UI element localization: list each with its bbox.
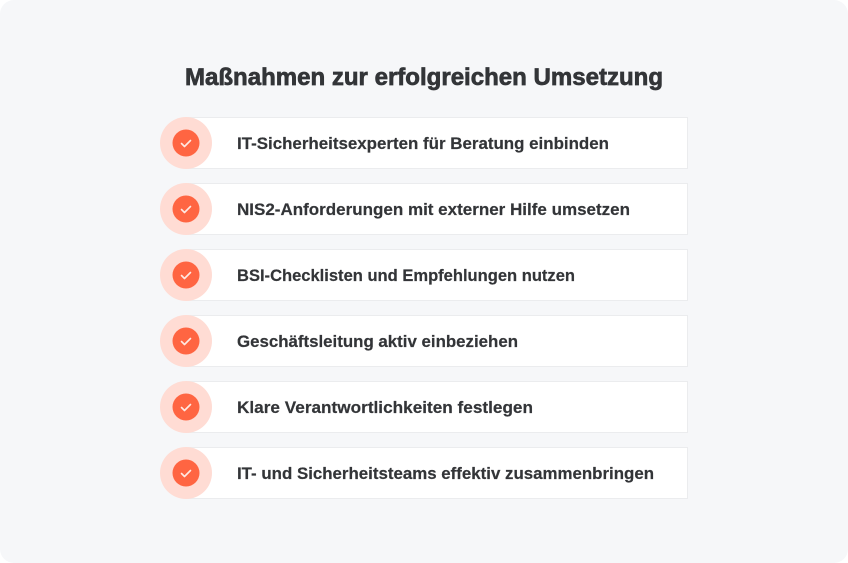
list item 5 [160, 381, 688, 433]
list item 6: IT- und Sicherheitsteams effektiv zusammenbringen [237, 464, 654, 483]
list item 4 [160, 315, 688, 367]
list item 6 [160, 447, 688, 499]
list item 5: Klare Verantwortlichkeiten festlegen [237, 398, 533, 417]
list item 2 [160, 183, 688, 235]
list item 3 [160, 249, 688, 301]
list item 1 [160, 117, 688, 169]
list item 1: IT-Sicherheitsexperten für Beratung einbinden [237, 134, 609, 153]
title: Maßnahmen zur erfolgreichen Umsetzung [185, 64, 663, 91]
list item 4: Geschäftsleitung aktiv einbeziehen [237, 332, 518, 351]
list item 3: BSI-Checklisten und Empfehlungen nutzen [237, 266, 575, 285]
list item 2: NIS2-Anforderungen mit externer Hilfe umsetzen [237, 200, 630, 219]
